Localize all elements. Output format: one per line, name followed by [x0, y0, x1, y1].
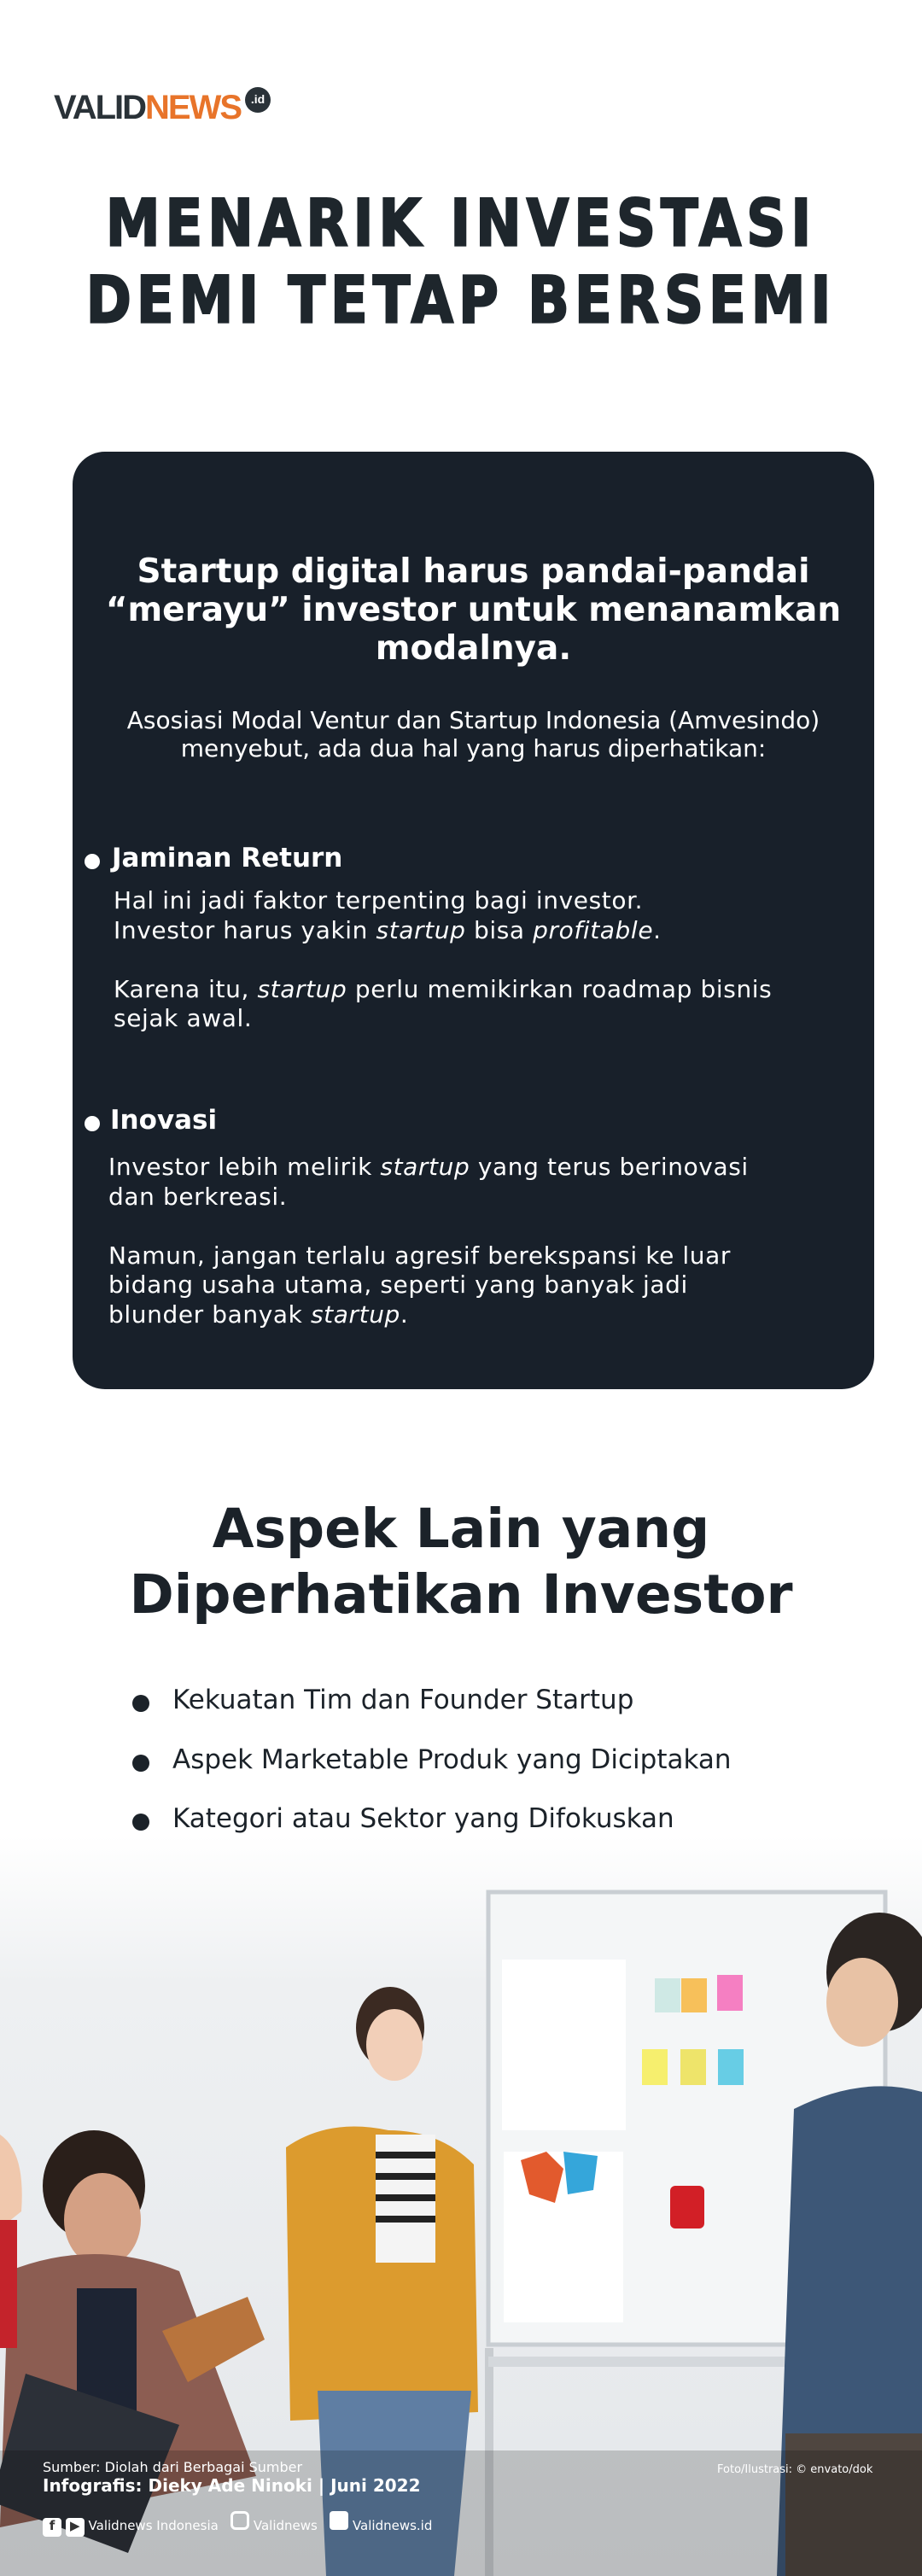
- footer credits: Sumber: Diolah dari Berbagai Sumber: [43, 2459, 302, 2475]
- panel: dark card: [73, 452, 874, 1389]
- point: Jaminan Return: Hal ini jadi faktor terpenting bagi investor.: [114, 886, 643, 914]
- point: Jaminan Return: sejak awal.: [114, 1004, 252, 1032]
- footer credits: Infografis: Dieky Ade Ninoki | Juni 2022: [43, 2475, 420, 2496]
- logo: VALIDNEWS: [54, 89, 241, 126]
- footer credits: [43, 2459, 432, 2537]
- bullet list: Kategori atau Sektor yang Difokuskan: [172, 1803, 674, 1834]
- card heading: Startup digital harus pandai-pandai: [137, 552, 809, 591]
- bullet list: Kekuatan Tim dan Founder Startup: [172, 1685, 633, 1715]
- point: Inovasi: bidang usaha utama, seperti yang banyak jadi: [108, 1270, 688, 1299]
- whiteboard: [485, 1892, 885, 2576]
- social icons: ▶: [70, 2518, 80, 2533]
- bullet list: Aspek Marketable Produk yang Diciptakan: [172, 1744, 732, 1775]
- card subtext: [127, 706, 820, 762]
- photo: team at whiteboard: [0, 1890, 922, 2576]
- social icons: [43, 2511, 432, 2537]
- section heading: Aspek Lain yang: [213, 1498, 709, 1560]
- bullet list: [132, 1685, 732, 1834]
- point: Inovasi: blunder banyak startup.: [108, 1300, 408, 1329]
- title: DEMI TETAP BERSEMI: [86, 264, 836, 338]
- point: Inovasi: dan berkreasi.: [108, 1182, 287, 1211]
- card heading: modalnya.: [376, 629, 571, 668]
- point: Inovasi: [85, 1105, 749, 1329]
- man left: [0, 2130, 265, 2553]
- woman center: [286, 1987, 478, 2576]
- point: Jaminan Return: [85, 843, 772, 1032]
- section heading: Diperhatikan Investor: [129, 1563, 793, 1626]
- logo: .id: [251, 92, 265, 106]
- card subtext: Asosiasi Modal Ventur dan Startup Indonesia (Amvesindo): [127, 706, 820, 734]
- card heading: “merayu” investor untuk menanamkan: [106, 591, 841, 629]
- point: Inovasi: Investor lebih melirik startup yang terus berinovasi: [108, 1153, 749, 1181]
- card heading: [106, 552, 841, 668]
- person right: [670, 1913, 922, 2576]
- point: Inovasi: Namun, jangan terlalu agresif berekspansi ke luar: [108, 1241, 731, 1269]
- point: Inovasi: Inovasi: [110, 1105, 217, 1136]
- point: Jaminan Return: Jaminan Return: [112, 843, 342, 873]
- social icons: Validnews Indonesia Validnews Validnews.id: [89, 2518, 432, 2533]
- card subtext: menyebut, ada dua hal yang harus diperhatikan:: [181, 734, 766, 762]
- photo credit: Foto/Ilustrasi: © envato/dok: [717, 2463, 872, 2476]
- title: MENARIK INVESTASI: [106, 187, 816, 261]
- title: [86, 187, 836, 338]
- social icons: f: [50, 2518, 55, 2533]
- section heading: [129, 1498, 793, 1626]
- point: Jaminan Return: Investor harus yakin startup bisa profitable.: [114, 915, 662, 944]
- point: Jaminan Return: Karena itu, startup perlu memikirkan roadmap bisnis: [114, 975, 772, 1002]
